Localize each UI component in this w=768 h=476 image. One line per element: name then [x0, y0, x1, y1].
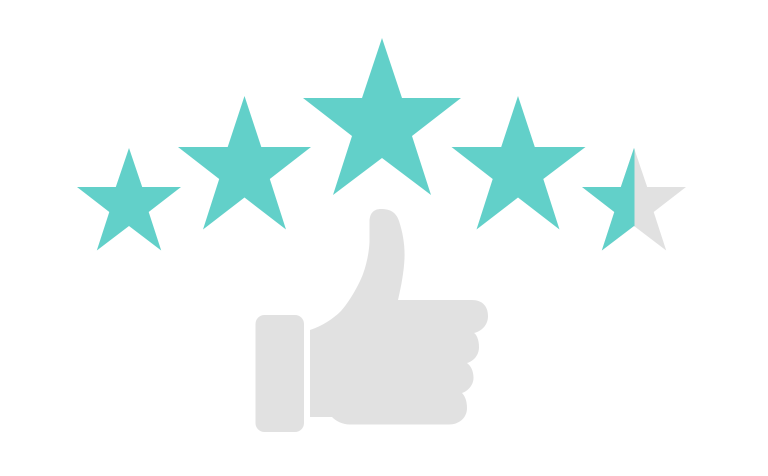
icon: star 2 medium [178, 96, 311, 230]
icon: half filled star 5 [582, 148, 686, 250]
icon: star 4 medium [452, 96, 586, 230]
thumb cuff [256, 315, 304, 432]
hand [310, 209, 488, 424]
icon: star 3 large center [303, 38, 461, 195]
rating illustration [77, 38, 686, 432]
icon: thumbs up [256, 209, 488, 432]
icon: star 1 small [77, 148, 181, 250]
